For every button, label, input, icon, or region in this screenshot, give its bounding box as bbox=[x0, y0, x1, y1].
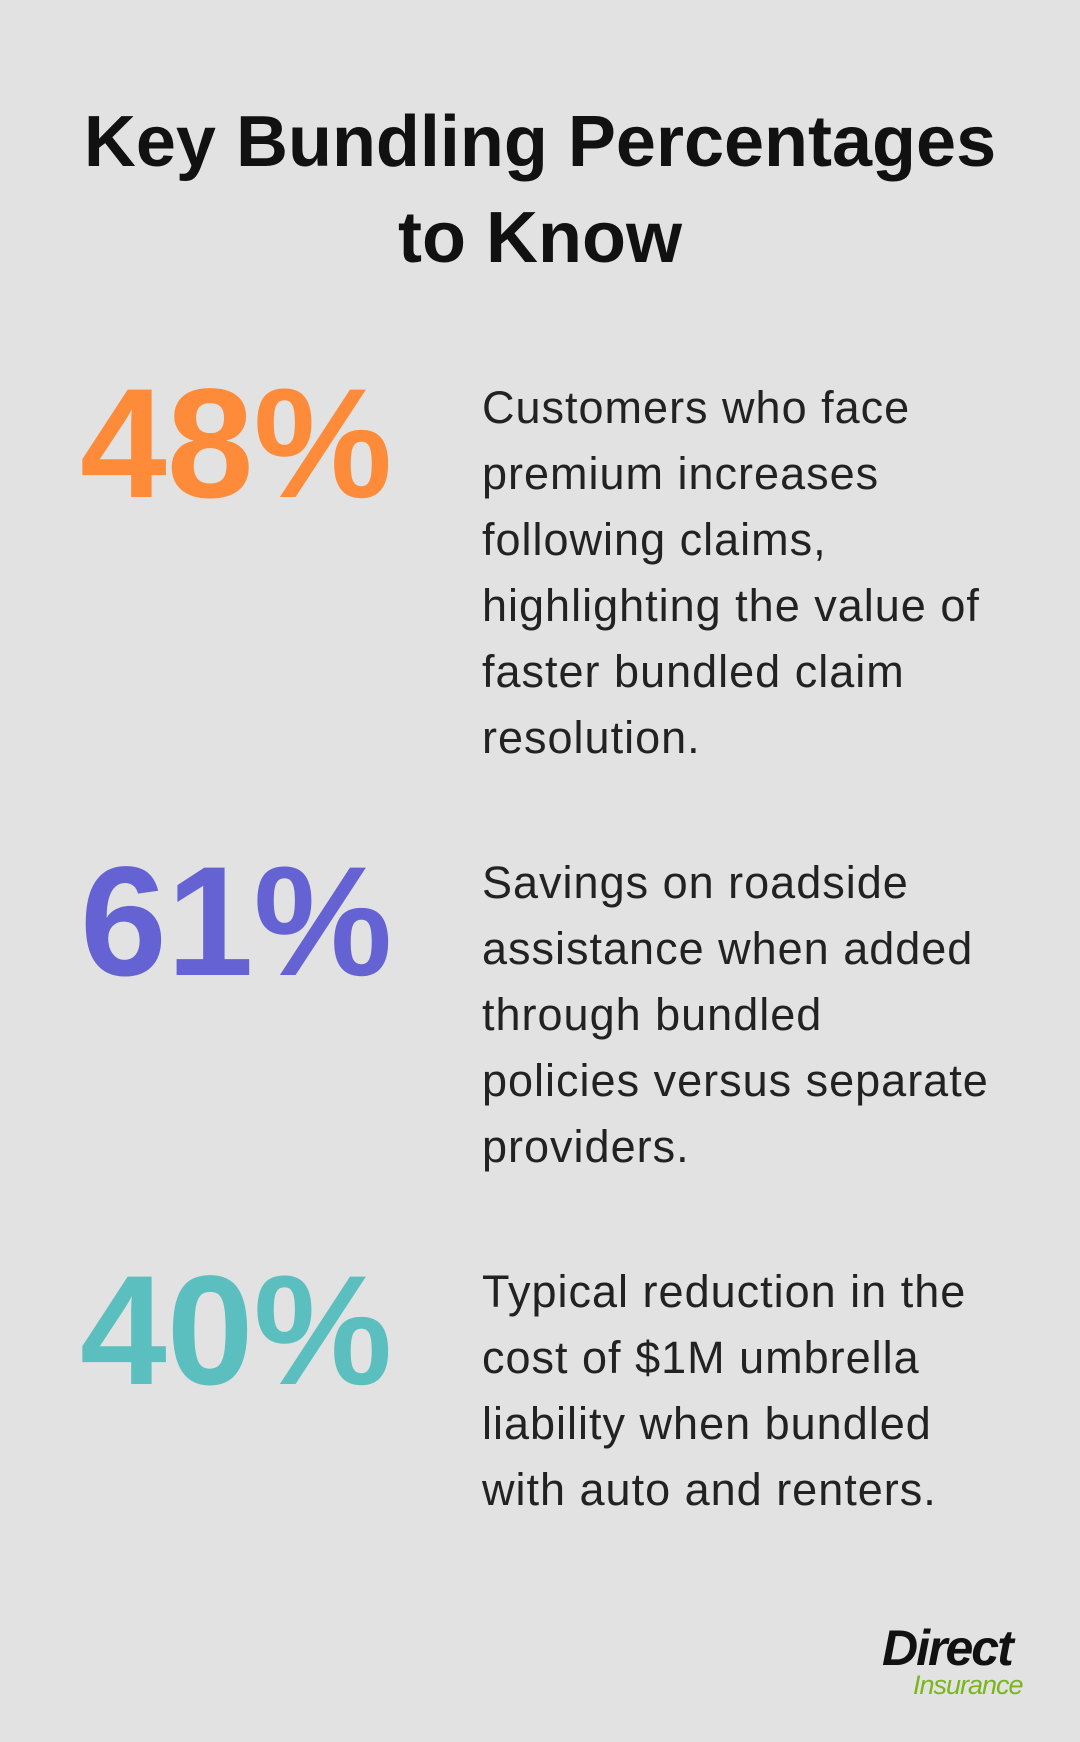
text: 61% description bbox=[482, 857, 989, 1172]
stat: 40%: 40% bbox=[80, 1244, 392, 1418]
title: Key Bundling Percentages bbox=[84, 102, 996, 182]
text: 48% description: Customers who face bbox=[482, 382, 910, 433]
text: 48% description: faster bundled claim bbox=[482, 646, 905, 697]
title bbox=[84, 102, 996, 278]
text: 40% description: with auto and renters. bbox=[482, 1464, 937, 1515]
text: 40% description: cost of $1M umbrella bbox=[482, 1332, 920, 1383]
text: 61% description: providers. bbox=[482, 1121, 690, 1172]
text: 48% description: premium increases bbox=[482, 448, 879, 499]
text: 48% description bbox=[482, 382, 980, 763]
text: 40% description bbox=[482, 1266, 966, 1515]
text: 48% description: resolution. bbox=[482, 712, 701, 763]
title: to Know bbox=[398, 198, 682, 278]
text: 48% description: highlighting the value of bbox=[482, 580, 980, 631]
text: 40% description: Typical reduction in the bbox=[482, 1266, 966, 1317]
text: 40% description: liability when bundled bbox=[482, 1398, 932, 1449]
text: 48% description: following claims, bbox=[482, 514, 827, 565]
logo: Direct Insurance bbox=[882, 1620, 1023, 1700]
stat: 48%: 48% bbox=[80, 357, 392, 531]
logo: Direct Insurance: Insurance bbox=[913, 1670, 1023, 1700]
stat: 61%: 61% bbox=[80, 835, 392, 1009]
text: 61% description: Savings on roadside bbox=[482, 857, 909, 908]
text: 61% description: policies versus separate bbox=[482, 1055, 989, 1106]
logo: Direct Insurance: Direct bbox=[882, 1620, 1012, 1676]
text: 61% description: assistance when added bbox=[482, 923, 973, 974]
text: 61% description: through bundled bbox=[482, 989, 822, 1040]
